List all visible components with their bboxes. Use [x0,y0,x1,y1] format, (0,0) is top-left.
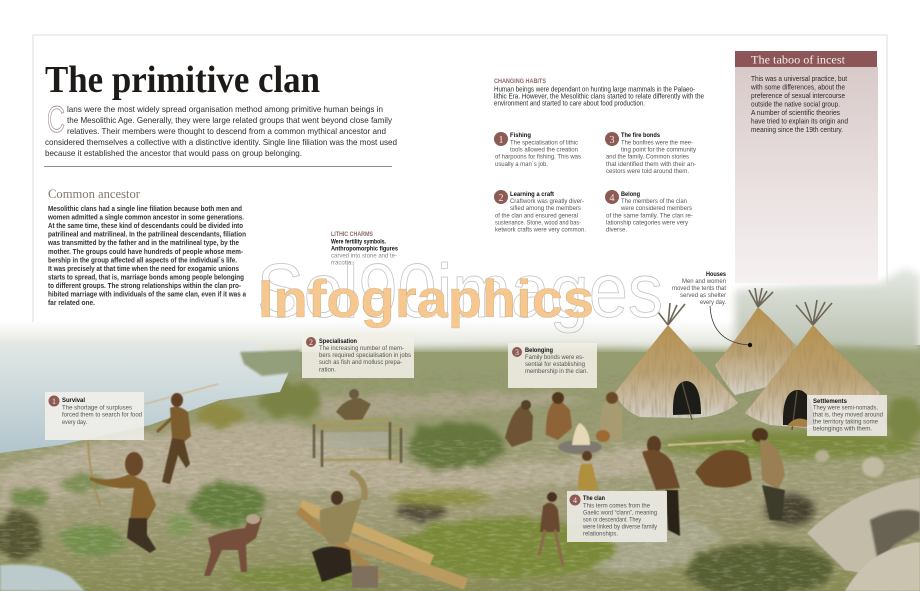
callout: the clan [567,491,667,542]
item: the fire bonds: and the family. Common stories [606,154,690,160]
callout: settlements: They were semi-nomads, [813,404,878,412]
text: This was a universal practice, but [751,74,847,83]
figure: rack worker [336,389,371,420]
hut 2 [715,288,795,395]
item: belong: lationship categories were very [606,220,689,226]
text: meaning since the 19th century. [751,125,843,134]
callout: houses with leader: Men and women [682,278,726,285]
water [0,342,292,453]
figures: children [539,451,598,566]
item: fishing: Fishing [510,132,531,139]
text: outside the native social group. [751,100,840,108]
callout: survival [45,392,144,440]
item: fishing: usually a man´s job. [495,161,548,168]
callout: belonging: membership in the clan. [525,368,588,375]
figure: archer [88,442,156,553]
lithic charms [331,232,398,266]
sky haze [0,320,735,352]
item: the fire bonds: that identified them with their an- [606,161,696,168]
intro text [45,99,397,158]
drop cap: C [47,99,65,140]
callout: settlements: the territory taking some [813,418,878,426]
callout: specialisation: The increasing number of mem- [319,345,404,352]
lithic charms: Anthropomorphic figures [331,246,398,252]
callout: the clan: relationships. [583,530,618,538]
item: learning a craft [494,190,586,234]
item: fishing: 1 [498,135,504,146]
common ancestor text: to different groups. The strong relationships within the clan pro- [48,281,241,290]
item: the fire bonds: The bonfires were the mee- [621,140,693,146]
label: CHANGING HABITS [494,79,546,85]
lithic charms: rracotta. [331,260,353,266]
figure: dog [204,514,262,576]
callout: survival: forced them to search for food [62,412,142,418]
item: learning a craft: ketwork crafts were very common. [495,226,586,234]
callout: houses with leader: Houses [706,271,726,278]
callout: specialisation: 2 [309,338,313,347]
callout: settlements: that is, they moved around [813,412,883,418]
callout: settlements [807,395,887,436]
common ancestor text: It was precisely at that time when the need for exogamic unions [48,264,239,273]
intro lines: the Mesolithic Age. Generally, they were large related groups that went beyond close family [67,116,393,125]
common ancestor text [47,204,247,307]
common ancestor text: starts to spread, that is, marriage bonds among people belonging [48,272,244,281]
changing habits [494,79,704,108]
callout: houses with leader: served as shelter [680,292,727,299]
watermark: Sol90images: Sol90images [257,249,663,334]
lithic charms: Were fertility symbols. [331,238,386,246]
item: learning a craft: Craftwork was greatly diver- [510,198,584,205]
callout: survival: every day. [62,419,87,426]
common ancestor text: women admitted a single common ancestor in some generations. [47,213,244,222]
intro [494,84,704,108]
panel: the taboo of incest: The taboo of incest [751,52,846,66]
green patches [188,483,268,527]
item: fishing: tools allowed the creation [510,146,578,154]
figure: log worker [298,472,466,588]
lithic charms: carved into stone and te- [331,252,397,260]
common ancestor text: patrilineal and matrilineal. In the patrilineal descendants, filiation [48,230,246,239]
intro lines: relatives. Their members were thought to descend from a common mythical ancestor and [67,127,386,136]
callout: the clan: 4 [573,496,577,505]
item: learning a craft: sustenance. Stone, wood and bas- [495,220,581,226]
callout: survival: Survival [62,397,85,404]
item: belong [605,190,693,234]
text: have tried to explain its origin and [751,116,848,126]
callout: belonging: 3 [515,348,519,357]
callout: houses with leader: moved the tents that [672,285,726,292]
callout: settlements: belongings with them. [813,426,872,432]
item: learning a craft: sified among the members [510,205,582,212]
callout: the clan: The clan [583,495,605,502]
common ancestor text: bership in the group affected all aspects of the individual´s life. [48,255,237,264]
figure: spear carrier [145,384,218,484]
callout: settlements: Settlements [813,398,847,405]
hut 1 [615,303,738,420]
intro lines: lans were the most widely spread organisation method among primitive human beings in [67,105,383,114]
callout: belonging [508,343,597,388]
callout: specialisation: ration. [319,366,336,374]
figures: carrying hide [642,428,785,536]
callout: the clan: were linked by diverse family [582,524,658,530]
callout: the clan: Gaelic word “clann”, meaning [583,510,657,516]
panel: the taboo of incest [735,51,877,134]
callout: houses with leader: every day. [700,299,726,306]
huts [615,288,880,430]
callout: the clan: This term comes from the [583,502,650,510]
hut 3 [745,300,880,430]
header [735,51,877,67]
landscape illustration [0,268,920,591]
page frame [33,35,887,322]
common ancestor text: Mesolithic clans had a single line filiation because both men and [48,204,242,213]
common ancestor text: mother. The groups could have hundreds of people whose mem- [48,247,243,256]
title: The primitive clan [45,59,320,101]
item: fishing: of harpoons for fishing. This was [495,154,582,160]
item: learning a craft: 2 [498,193,504,204]
item: belong: 4 [610,193,614,204]
item: learning a craft: Learning a craft [510,191,555,198]
intro: environment and started to care about food production. [494,98,645,108]
intro lines [45,105,397,158]
intro: lithic Era. However, the Mesolithic clans started to relate differently with the [494,92,704,100]
item: belong: diverse. [606,226,627,234]
common ancestor text: was transmitted by the father and in the matrilineal type, by the [47,238,239,247]
lithic charms: LITHIC CHARMS [331,232,373,238]
item: the fire bonds: ting point for the community [621,146,697,154]
item: the fire bonds: 3 [610,135,614,146]
callout: specialisation: Specialisation [319,338,357,345]
text: A number of scientific theories [751,108,840,117]
text [750,74,848,134]
intro lines: because it established the ancestor that would pass on group belonging. [45,149,302,158]
intro lines: considered themselves a collective with a distinctive identity. Single line filiation was the most used [45,138,397,147]
text: preference of sexual intercourse [751,91,845,100]
callout: belonging: Belonging [525,347,553,354]
intro: Human beings were dependant on hunting large mammals in the Palaeo- [494,84,696,94]
item: fishing [494,132,582,168]
item: belong: The members of the clan [621,198,687,205]
ground texture [0,360,920,591]
item: belong: were considered members [620,205,693,212]
taboo panel background [735,67,878,283]
callout: the clan: son or descendant. They [583,516,642,524]
callout: specialisation [302,332,414,378]
callout: belonging: Family bonds were es- [525,354,584,361]
watermark: Infographics: Infographics [258,270,594,329]
common ancestor text: hibited marriage with individuals of the same clan, even if it was a [48,290,247,298]
item: fishing: The specialisation of lithic [510,140,579,146]
text: with some differences, about the [750,82,845,92]
path textures [0,420,660,510]
common ancestor text: far related one. [48,298,95,307]
drying rack [312,420,405,467]
callout: survival: 1 [52,397,56,406]
figures: group at the fire [505,392,622,454]
common ancestor text: At the same time, these kind of descendants could be divided into [48,221,243,230]
item: the fire bonds: cestors were told around them. [606,168,689,175]
callout: survival: The shortage of surpluses [62,404,133,412]
item: the fire bonds: The fire bonds [621,132,660,139]
item: belong: of the same family. The clan re- [606,212,693,220]
callout: specialisation: such as fish and mollusc prepa- [319,359,402,366]
item: belong: Belong [621,191,640,198]
item: learning a craft: of the clan and ensured general [495,212,578,220]
callout: specialisation: bers required specialisation in jobs [319,352,412,359]
heading: common ancestor: Common ancestor [48,186,141,201]
item: the fire bonds [605,132,697,175]
callout: houses with leader [672,271,752,347]
callout: belonging: sential for establishing [525,361,585,368]
rocks [807,478,920,575]
